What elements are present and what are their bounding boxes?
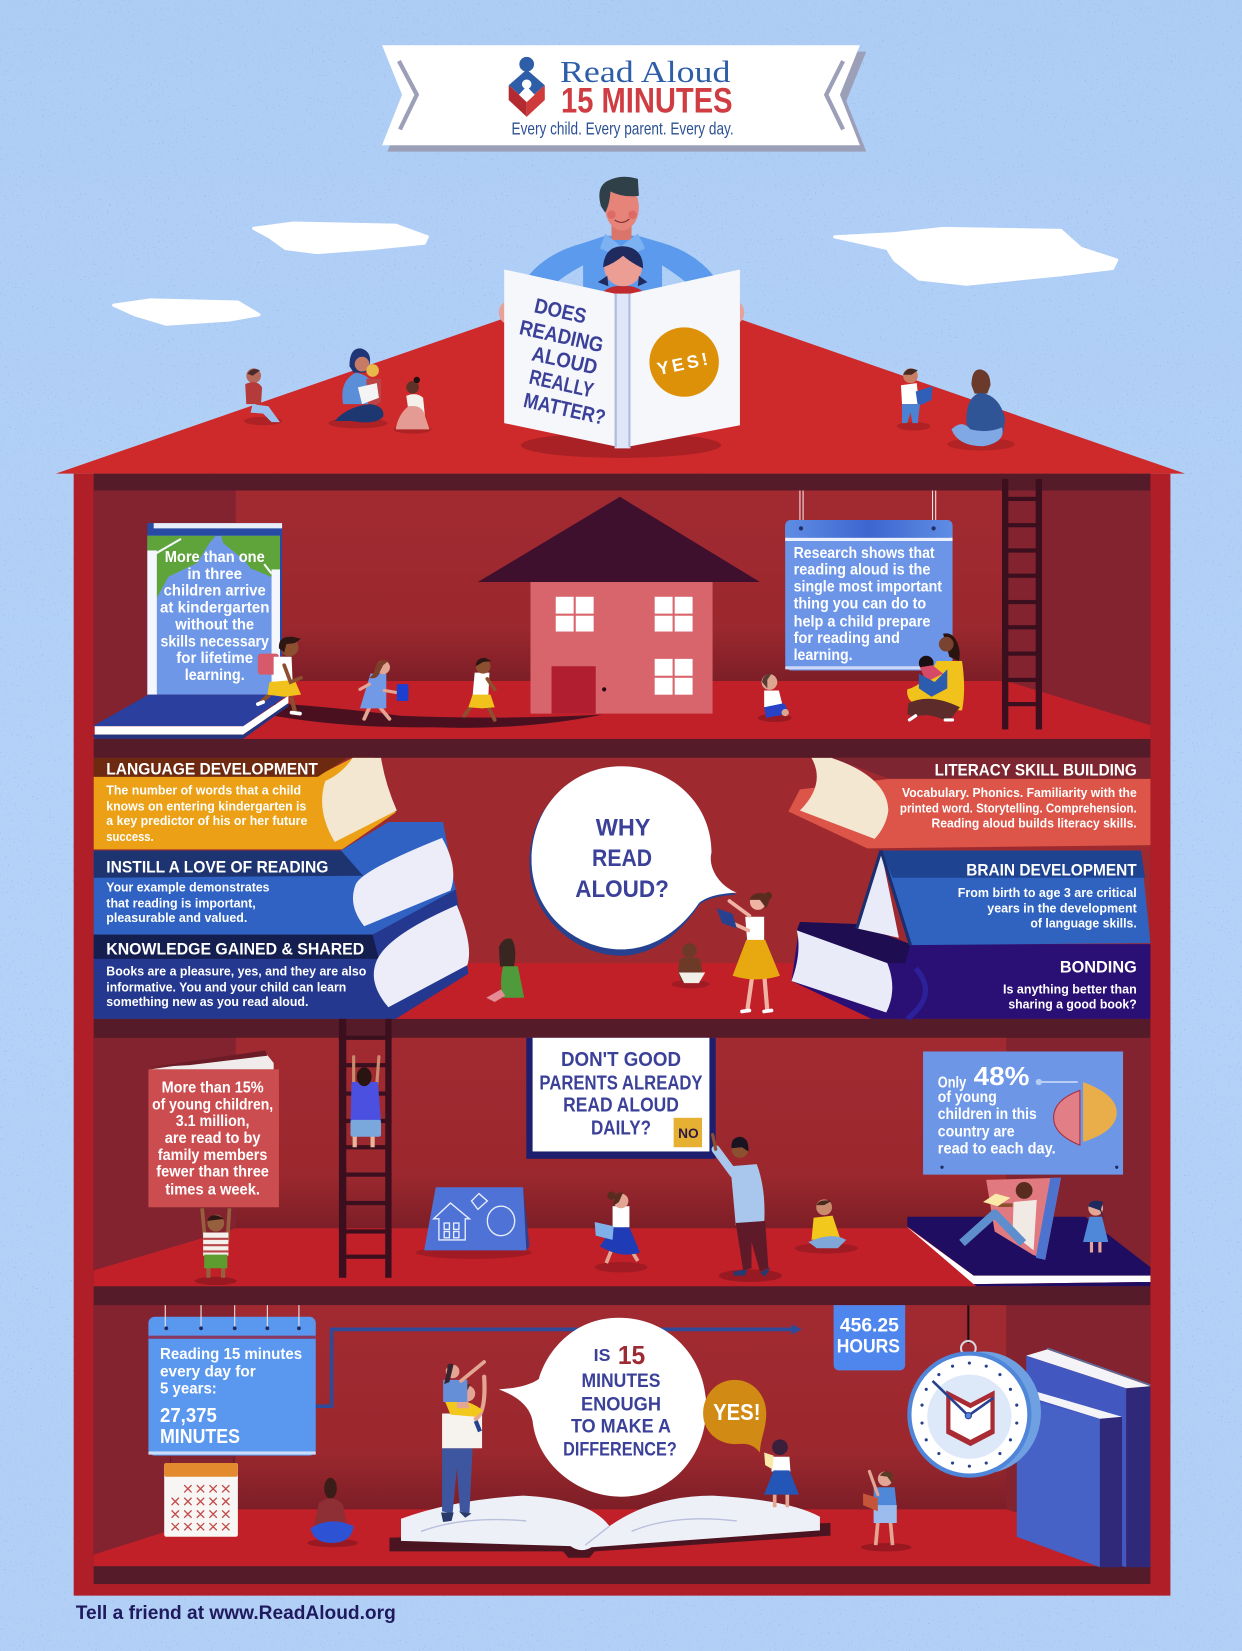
instill text: Your example demonstrates bbox=[106, 880, 269, 894]
question text: READING bbox=[517, 316, 605, 357]
pie chart bbox=[1036, 1079, 1117, 1145]
bubble text: TO MAKE A bbox=[571, 1416, 671, 1437]
room 3 bbox=[94, 1038, 1150, 1286]
book stack left: knowledge gained and shared bbox=[94, 889, 469, 1019]
question text: MATTER? bbox=[521, 389, 608, 430]
knowledge text: informative. You and your child can learn bbox=[106, 980, 346, 994]
reading man bbox=[962, 1182, 1037, 1250]
platform book with reader bbox=[906, 1178, 1150, 1286]
knowledge text: KNOWLEDGE GAINED & SHARED bbox=[106, 940, 364, 959]
walking boy bbox=[464, 658, 495, 720]
room 1: walking shadow bbox=[274, 703, 602, 728]
sign text: DON'T GOOD bbox=[561, 1049, 681, 1071]
sign text bbox=[539, 1049, 703, 1140]
ladder, room 1 bbox=[1002, 479, 1042, 729]
room 4 bbox=[94, 1305, 1150, 1566]
room 1: standing book with text bbox=[93, 523, 288, 739]
roof family: kneeling girl bbox=[394, 377, 432, 434]
brain text bbox=[958, 862, 1138, 930]
instill text bbox=[106, 858, 328, 925]
shadow under book bbox=[521, 433, 721, 458]
roof family: sitting toddler bbox=[244, 368, 282, 425]
book text: without the bbox=[174, 616, 254, 633]
statistic text: family members bbox=[158, 1147, 267, 1164]
sign copy bbox=[938, 1061, 1056, 1158]
hanging clock with book emblem bbox=[907, 1305, 1041, 1478]
little girl on book bbox=[1083, 1201, 1108, 1253]
sign text: READ ALOUD bbox=[563, 1094, 679, 1116]
knowledge text: Books are a pleasure, yes, and they are also bbox=[106, 965, 367, 979]
knowledge text bbox=[106, 940, 367, 1009]
brain text: years in the development bbox=[987, 902, 1138, 916]
book text: in three bbox=[187, 566, 242, 583]
knowledge text: something new as you read aloud. bbox=[106, 995, 308, 1009]
boy holding up sign bbox=[195, 1208, 237, 1285]
statistic text: of young children, bbox=[152, 1096, 273, 1113]
sign text: DAILY? bbox=[591, 1118, 651, 1140]
hours box bbox=[834, 1305, 905, 1370]
logo wordmark: Read Aloud bbox=[560, 55, 730, 89]
banner: Read Aloud 15 Minutes logo bbox=[382, 45, 866, 152]
brain text: BRAIN DEVELOPMENT bbox=[966, 862, 1137, 880]
question text: DOES bbox=[532, 295, 589, 328]
room 1 bbox=[94, 490, 1150, 739]
bubble text bbox=[563, 1340, 677, 1461]
cloud left upper bbox=[254, 223, 427, 253]
cloud left lower bbox=[114, 300, 259, 324]
yes circle bbox=[649, 327, 719, 397]
open book cover on floor bbox=[93, 695, 288, 739]
sign copy: children in this bbox=[938, 1106, 1037, 1123]
bubble text: IS bbox=[594, 1345, 611, 1365]
minutes text bbox=[160, 1346, 302, 1448]
language text: success. bbox=[106, 830, 154, 844]
room 2 bbox=[94, 758, 1150, 1019]
running boy with backpack bbox=[258, 637, 301, 714]
roof family: seated adult bbox=[947, 369, 1015, 450]
bubble text bbox=[575, 815, 669, 903]
book text: learning. bbox=[185, 667, 245, 684]
book text: More than one bbox=[165, 549, 265, 566]
literacy text: Vocabulary. Phonics. Familiarity with the bbox=[902, 786, 1137, 800]
seated girl from behind bbox=[307, 1478, 358, 1547]
no sticky note: NO bbox=[678, 1126, 699, 1141]
blue statistic sign: only 48 percent bbox=[923, 1051, 1123, 1175]
statistic text: are read to by bbox=[165, 1130, 261, 1147]
walking girl in blue skirt bbox=[595, 1191, 647, 1273]
big open book on floor bbox=[389, 1496, 830, 1558]
roof bbox=[56, 278, 1185, 474]
book text: children arrive bbox=[164, 583, 266, 600]
brain text: of language skills. bbox=[1030, 916, 1137, 930]
book stack right: literacy skill building bbox=[788, 758, 1150, 848]
question sign: don't good parents already read aloud daily bbox=[526, 1038, 716, 1159]
sign copy: country are bbox=[938, 1124, 1015, 1141]
bonding text: sharing a good book? bbox=[1008, 997, 1137, 1011]
language text bbox=[106, 761, 318, 844]
big open book: does reading aloud really matter bbox=[504, 269, 740, 448]
statistic text: More than 15% bbox=[162, 1080, 264, 1097]
bubble text: WHY bbox=[596, 815, 650, 842]
marked calendar bbox=[164, 1457, 238, 1537]
logo 15 minutes: 15 MINUTES bbox=[561, 83, 733, 121]
language text: The number of words that a child bbox=[106, 784, 301, 798]
sign copy: 48% bbox=[974, 1061, 1029, 1091]
book text bbox=[160, 549, 269, 684]
stacked books behind clock bbox=[1017, 1348, 1150, 1567]
walking girl with blue box bbox=[360, 660, 408, 719]
logo tagline: Every child. Every parent. Every day. bbox=[512, 119, 734, 139]
research text: help a child prepare bbox=[794, 613, 930, 630]
red book sign: more than 15 percent bbox=[148, 1050, 279, 1207]
roof family: mother reading with child bbox=[328, 348, 387, 428]
bubble text: ENOUGH bbox=[581, 1394, 661, 1415]
language text: knows on entering kindergarten is bbox=[106, 799, 306, 813]
calendar sign: reading 15 minutes bbox=[148, 1305, 316, 1456]
yes circle: YES! bbox=[655, 348, 713, 379]
sign text: PARENTS ALREADY bbox=[539, 1072, 703, 1094]
roof family: boy with book bbox=[897, 368, 933, 430]
book stack left: instill a love of reading bbox=[94, 822, 456, 935]
minutes text: 27,375 bbox=[160, 1405, 217, 1427]
statistic text: 3.1 million, bbox=[176, 1113, 249, 1130]
statistic text: times a week. bbox=[165, 1182, 260, 1199]
bubble text: READ bbox=[592, 845, 652, 872]
speech bubble: why read aloud bbox=[529, 766, 737, 956]
clock hands bbox=[933, 1381, 994, 1419]
research text: for reading and bbox=[794, 630, 900, 647]
woman in yellow skirt with book bbox=[717, 892, 780, 1011]
icon: parent and child logo bbox=[509, 57, 545, 117]
book emblem bbox=[946, 1390, 995, 1446]
research text: Research shows that bbox=[794, 545, 935, 562]
hands holding book bbox=[499, 302, 744, 323]
hours box: 456.25 bbox=[840, 1315, 899, 1336]
bonding text bbox=[1003, 959, 1137, 1011]
question text: REALLY bbox=[527, 366, 596, 402]
kneeling girl in green bbox=[486, 939, 524, 1002]
book text: skills necessary bbox=[161, 633, 269, 650]
statistic text bbox=[152, 1080, 273, 1199]
boy climbing ladder bbox=[350, 1057, 381, 1147]
literacy text: LITERACY SKILL BUILDING bbox=[935, 762, 1137, 780]
sign copy: of young bbox=[938, 1089, 997, 1106]
literacy text: printed word. Storytelling. Comprehension. bbox=[900, 802, 1137, 816]
minutes text: every day for bbox=[160, 1364, 256, 1381]
research text: learning. bbox=[794, 647, 853, 664]
boy with red book bbox=[861, 1471, 911, 1551]
mother and child reading bbox=[907, 633, 964, 720]
minutes text: 5 years: bbox=[160, 1381, 217, 1398]
minutes text: MINUTES bbox=[160, 1426, 240, 1448]
book stack right: brain development bbox=[857, 850, 1150, 945]
statistic text: fewer than three bbox=[156, 1164, 269, 1181]
brain text: From birth to age 3 are critical bbox=[958, 886, 1137, 900]
sitting baby bbox=[758, 674, 792, 722]
literacy text bbox=[900, 762, 1137, 830]
book stack right: bonding bbox=[792, 922, 1150, 1019]
father and daughter bbox=[528, 177, 714, 316]
speech bubble: is 15 minutes enough bbox=[499, 1318, 706, 1497]
instill text: INSTILL A LOVE OF READING bbox=[106, 858, 328, 877]
no sticky note bbox=[674, 1118, 702, 1147]
hours box: HOURS bbox=[837, 1337, 900, 1358]
question text bbox=[517, 295, 608, 430]
man with child on shoulders bbox=[441, 1362, 485, 1522]
bonding text: Is anything better than bbox=[1003, 983, 1137, 997]
research text: thing you can do to bbox=[794, 595, 926, 612]
house illustration bbox=[478, 497, 760, 714]
research sign bbox=[785, 490, 953, 670]
yes bubble: YES! bbox=[713, 1399, 760, 1425]
research text: single most important bbox=[794, 579, 942, 596]
bubble text: MINUTES bbox=[582, 1371, 660, 1392]
question text: ALOUD bbox=[530, 343, 599, 379]
literacy text: Reading aloud builds literacy skills. bbox=[931, 816, 1137, 830]
book text: at kindergarten bbox=[160, 600, 269, 617]
bubble text: 15 bbox=[618, 1340, 645, 1370]
research text: reading aloud is the bbox=[794, 562, 930, 579]
arrow from minutes to hours bbox=[316, 1324, 802, 1406]
bonding text: BONDING bbox=[1060, 959, 1137, 977]
sign copy: read to each day. bbox=[938, 1141, 1056, 1158]
footer: tell a friend: Tell a friend at www.ReadAloud.org bbox=[76, 1602, 396, 1624]
man writing on sign bbox=[713, 1135, 782, 1282]
language text: LANGUAGE DEVELOPMENT bbox=[106, 761, 318, 779]
instill text: pleasurable and valued. bbox=[106, 911, 247, 925]
upright pink page bbox=[986, 1178, 1061, 1260]
instill text: that reading is important, bbox=[106, 896, 256, 910]
girl standing on book bbox=[764, 1439, 799, 1507]
book text: for lifetime bbox=[176, 650, 253, 667]
ladder, room 3 bbox=[339, 1019, 392, 1278]
small child seated bbox=[672, 943, 709, 988]
research text bbox=[794, 545, 942, 664]
bubble text: DIFFERENCE? bbox=[563, 1440, 677, 1461]
easel board with house and globe bbox=[416, 1187, 532, 1259]
bubble text: ALOUD? bbox=[575, 876, 669, 903]
house body bbox=[74, 474, 1170, 1596]
sign copy: Only bbox=[938, 1074, 967, 1091]
book stack left: language development bbox=[94, 758, 397, 849]
language text: a key predictor of his or her future bbox=[106, 814, 307, 828]
minutes text: Reading 15 minutes bbox=[160, 1346, 302, 1363]
clock tick marks bbox=[920, 1361, 1018, 1468]
cloud right bbox=[835, 228, 1117, 284]
seated boy in yellow bbox=[795, 1199, 858, 1254]
yes bubble bbox=[703, 1380, 766, 1452]
